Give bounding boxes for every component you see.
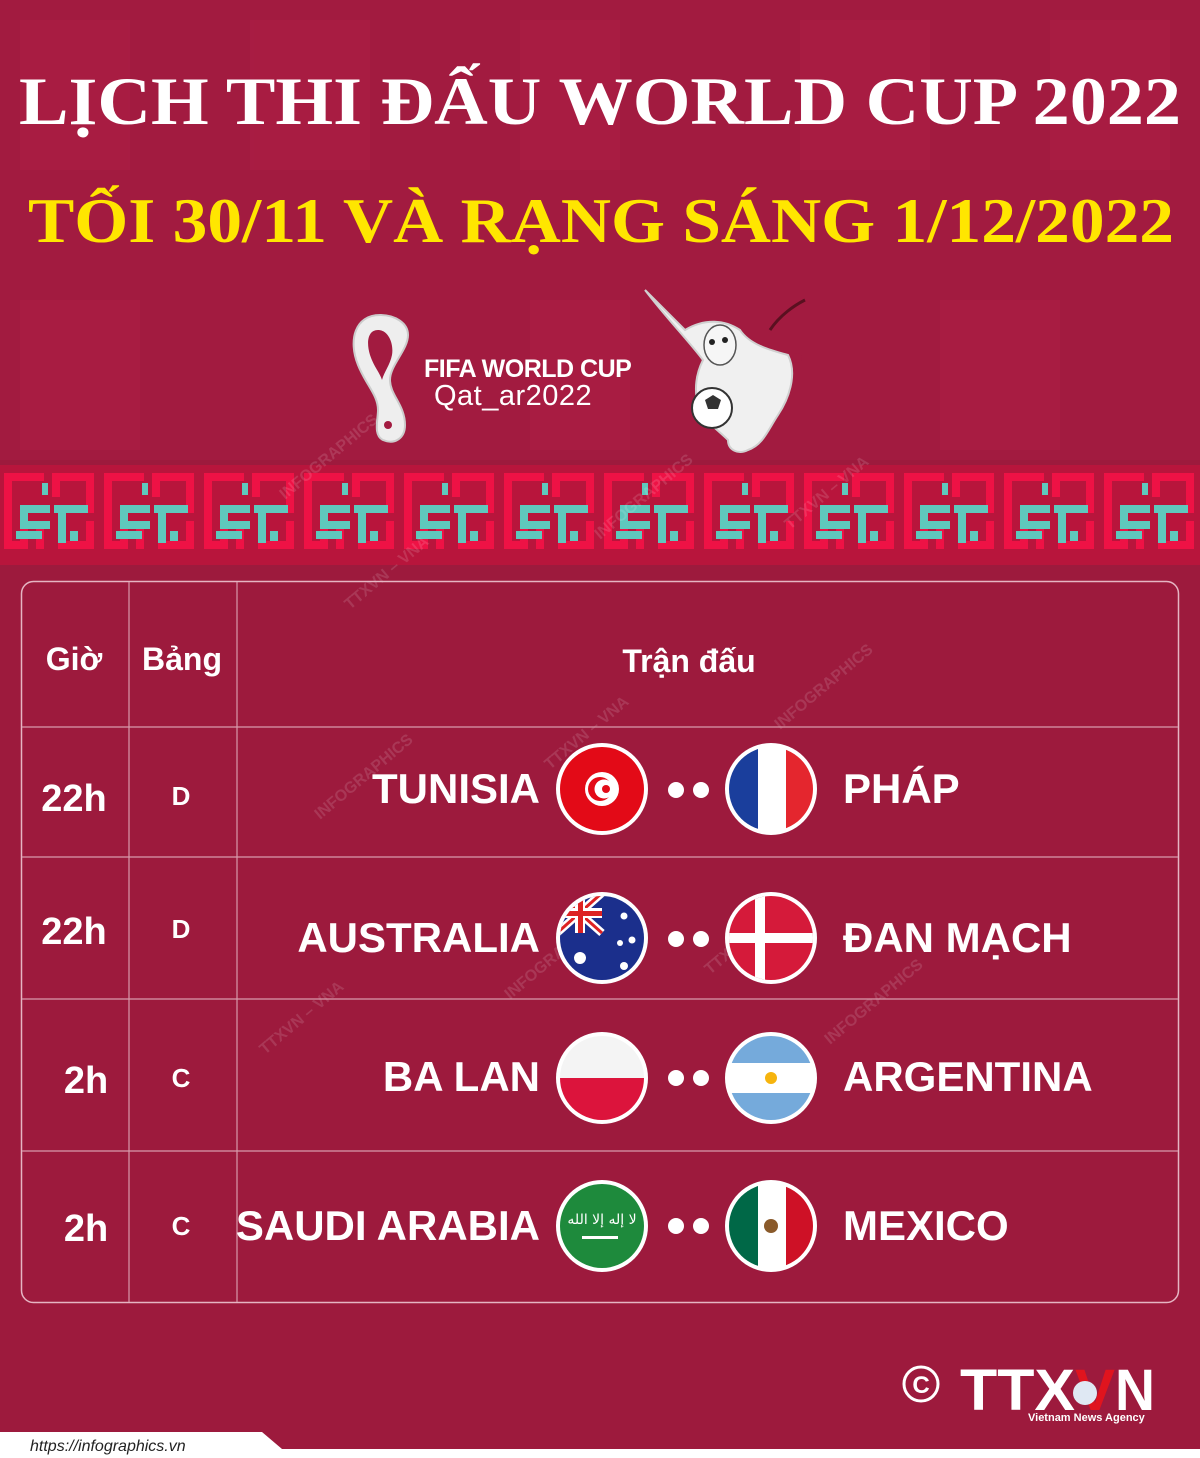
times and groups: D bbox=[172, 914, 190, 944]
watermarks: TTXVN – VNA bbox=[782, 453, 873, 533]
team names: AUSTRALIA bbox=[297, 914, 540, 961]
times and groups: 2h bbox=[64, 1208, 108, 1250]
times and groups bbox=[41, 778, 191, 1250]
title: LỊCH THI ĐẤU WORLD CUP 2022 bbox=[19, 63, 1181, 139]
times and groups: 2h bbox=[64, 1060, 108, 1102]
watermarks: INFOGRAPHICS bbox=[502, 911, 607, 1003]
watermarks: INFOGRAPHICS bbox=[277, 411, 382, 503]
team names: PHÁP bbox=[843, 765, 960, 812]
subtitle: TỐI 30/11 VÀ RẠNG SÁNG 1/12/2022 bbox=[28, 185, 1174, 256]
icon: flag Argentina bbox=[725, 1032, 817, 1124]
team names bbox=[236, 765, 1093, 1249]
times and groups: D bbox=[172, 781, 190, 811]
icon: flag Mexico bbox=[725, 1180, 818, 1272]
team names: ARGENTINA bbox=[843, 1053, 1093, 1100]
team names: SAUDI ARABIA bbox=[236, 1202, 540, 1249]
icon: flag Tunisia bbox=[556, 743, 648, 835]
times and groups: 22h bbox=[41, 778, 107, 820]
logo: TTXVN bbox=[904, 1358, 1155, 1424]
table header: Bảng bbox=[142, 641, 222, 677]
logo: FIFA World Cup Qatar 2022 bbox=[354, 315, 631, 442]
team names: MEXICO bbox=[843, 1202, 1009, 1249]
logo: TTXVN: Vietnam News Agency bbox=[1028, 1412, 1146, 1424]
team names: TUNISIA bbox=[372, 765, 540, 812]
icon: mascot La'eeb bbox=[645, 290, 805, 452]
team names: ĐAN MẠCH bbox=[843, 914, 1072, 961]
footer URL tab bbox=[0, 1432, 1200, 1458]
panel: schedule table bbox=[22, 582, 1178, 1302]
watermarks: INFOGRAPHICS bbox=[772, 641, 877, 733]
watermarks: INFOGRAPHICS bbox=[312, 731, 417, 823]
times and groups: 22h bbox=[41, 911, 107, 953]
icon: flag Australia bbox=[556, 892, 648, 984]
watermarks: TTXVN – VNA bbox=[702, 898, 793, 978]
logo: TTXVN: TTX bbox=[960, 1358, 1075, 1423]
team names: BA LAN bbox=[383, 1053, 540, 1100]
icon: flag Saudi Arabia: لا إله إلا الله bbox=[567, 1212, 637, 1228]
times and groups: C bbox=[172, 1063, 191, 1093]
footer URL tab: https://infographics.vn bbox=[30, 1438, 186, 1455]
watermarks: TTXVN – VNA bbox=[342, 533, 433, 613]
icon: flag Saudi Arabia bbox=[556, 1180, 648, 1272]
times and groups: C bbox=[172, 1211, 191, 1241]
logo: FIFA World Cup Qatar 2022: Qat_ar2022 bbox=[434, 380, 592, 412]
watermarks: INFOGRAPHICS bbox=[592, 451, 697, 543]
watermarks bbox=[257, 411, 927, 1058]
decorative pattern band bbox=[0, 465, 1200, 565]
vs dots bbox=[668, 782, 709, 1234]
watermarks: TTXVN – VNA bbox=[257, 978, 348, 1058]
logo: TTXVN: C bbox=[912, 1372, 930, 1399]
table header: Trận đấu bbox=[622, 643, 756, 679]
icon: flag France bbox=[725, 743, 818, 835]
icon: trophy emblem bbox=[354, 315, 408, 442]
logo: TTXVN: V bbox=[1075, 1358, 1115, 1423]
icon: flag Poland bbox=[556, 1032, 648, 1124]
logo: TTXVN: N bbox=[1115, 1358, 1155, 1423]
watermarks: TTXVN – VNA bbox=[542, 693, 633, 773]
table header bbox=[46, 641, 756, 679]
table header: Giờ bbox=[46, 641, 103, 677]
icon: flag Denmark bbox=[725, 892, 817, 984]
logo text: FIFA WORLD CUP bbox=[424, 355, 631, 383]
watermarks: INFOGRAPHICS bbox=[822, 956, 927, 1048]
